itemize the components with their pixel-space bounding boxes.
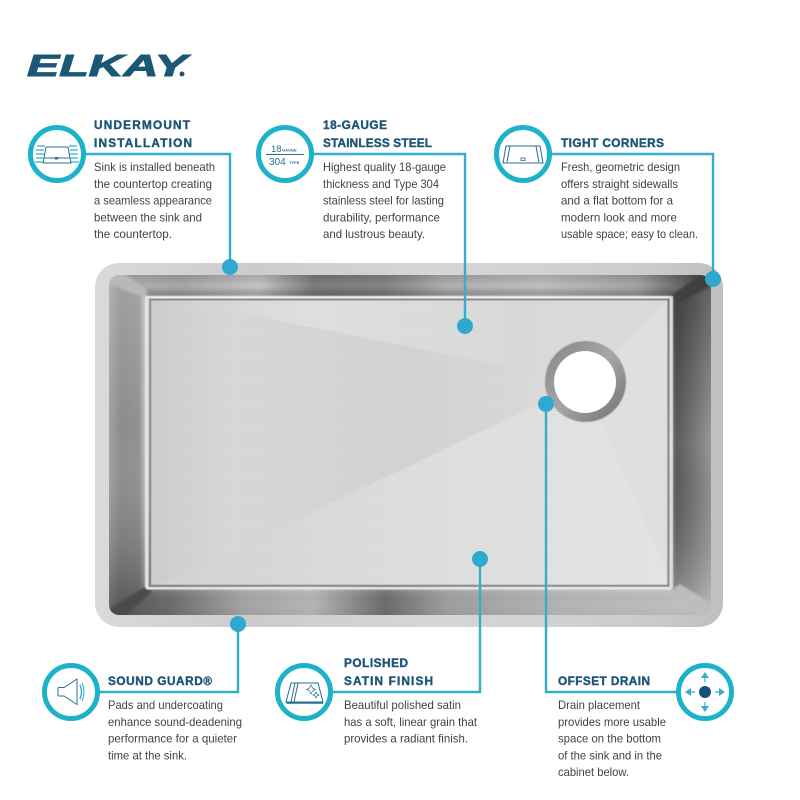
marker dot	[705, 271, 721, 287]
sink rim	[95, 263, 723, 627]
marker dot	[222, 259, 238, 275]
connector line	[100, 624, 238, 692]
description: the countertop creating	[94, 177, 212, 191]
description	[561, 160, 698, 241]
callout: tight corners	[496, 128, 721, 287]
description	[94, 160, 215, 241]
description	[108, 698, 242, 762]
marker dot	[457, 318, 473, 334]
heading: OFFSET DRAIN	[558, 674, 650, 688]
description	[558, 698, 666, 779]
description: Sink is installed beneath	[94, 160, 215, 174]
description: provides a radiant finish.	[344, 732, 468, 746]
icon: polished sheet	[278, 666, 330, 718]
sink floor facets	[145, 294, 675, 592]
icon: gauge and type: 304	[269, 157, 286, 168]
marker dot	[538, 396, 554, 412]
heading: INSTALLATION	[94, 136, 192, 150]
description: provides more usable	[558, 715, 666, 729]
icon: speaker	[44, 666, 98, 718]
description: and lustrous beauty.	[323, 227, 425, 241]
icon: sink between countertops	[30, 128, 84, 180]
description: modern look and more	[561, 210, 677, 224]
description: enhance sound-deadening	[108, 715, 242, 729]
icon: four-way arrows	[678, 666, 732, 718]
description: of the sink and in the	[558, 748, 662, 762]
description: Beautiful polished satin	[344, 698, 461, 712]
description: between the sink and	[94, 210, 202, 224]
description: durability, performance	[323, 210, 440, 224]
heading: POLISHED	[344, 656, 408, 670]
description: the countertop.	[94, 227, 172, 241]
heading	[323, 118, 432, 150]
heading: 18-GAUGE	[323, 118, 387, 132]
description: Pads and undercoating	[108, 698, 223, 712]
description: performance for a quieter	[108, 732, 237, 746]
connector line	[333, 559, 480, 692]
heading: SOUND GUARD®	[108, 674, 212, 688]
connector line	[85, 154, 230, 267]
description: Fresh, geometric design	[561, 160, 680, 174]
heading: TIGHT CORNERS	[561, 136, 664, 150]
description: and a flat bottom for a	[561, 194, 673, 208]
connector line	[313, 154, 465, 326]
description: a seamless appearance	[94, 194, 212, 208]
heading: STAINLESS STEEL	[323, 136, 432, 150]
drain	[545, 341, 626, 422]
description: Highest quality 18-gauge	[323, 160, 446, 174]
marker dot	[472, 551, 488, 567]
description: thickness and Type 304	[323, 177, 439, 191]
description	[344, 698, 478, 746]
connector line	[546, 404, 676, 692]
icon: gauge and type: 18	[271, 144, 282, 155]
callout: sound guard	[44, 616, 246, 762]
sink edge highlights	[145, 296, 673, 590]
callout: polished satin finish	[278, 551, 488, 746]
description: has a soft, linear grain that	[344, 715, 478, 729]
icon: tight corners sink	[496, 128, 550, 180]
heading: SATIN FINISH	[344, 674, 433, 688]
description	[323, 160, 446, 241]
heading	[344, 656, 433, 688]
heading: UNDERMOUNT	[94, 118, 191, 132]
callout: 18-gauge stainless steel	[258, 118, 473, 334]
heading	[94, 118, 192, 150]
description: space on the bottom	[558, 732, 661, 746]
marker dot	[230, 616, 246, 632]
icon: gauge and type: GAUGE	[282, 148, 297, 152]
sink basin	[105, 271, 715, 619]
description: Drain placement	[558, 698, 641, 712]
description: offers straight sidewalls	[561, 177, 678, 191]
connector line	[551, 154, 713, 279]
callout: offset drain	[538, 396, 732, 779]
logo: Elkay: ELKAY	[27, 49, 191, 83]
description: stainless steel for lasting	[323, 194, 444, 208]
icon: gauge and type: TYPE	[289, 160, 300, 165]
icon: gauge and type	[258, 128, 312, 180]
description: usable space; easy to clean.	[561, 227, 698, 241]
description: cabinet below.	[558, 765, 629, 779]
description: time at the sink.	[108, 748, 187, 762]
logo: Elkay	[27, 49, 191, 83]
sink photo	[95, 263, 723, 627]
callout: undermount installation	[30, 118, 238, 275]
